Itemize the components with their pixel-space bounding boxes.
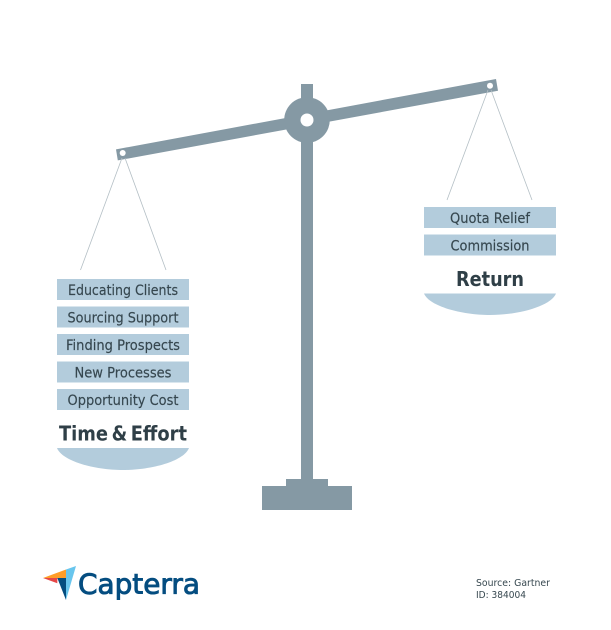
right pan: return: [424, 207, 556, 315]
source note: Source: Gartner: [476, 578, 551, 589]
left pan strings: [80, 158, 166, 270]
row: Sourcing Support: [57, 306, 189, 328]
wordmark: Capterra: [78, 568, 200, 600]
row: New Processes: New Processes: [74, 366, 172, 382]
right pan bowl: [424, 294, 556, 315]
left pan bowl: [57, 448, 189, 470]
scale stand and beam: [116, 79, 498, 510]
row: Educating Clients: [57, 279, 189, 300]
icon: Capterra arrow: [43, 566, 76, 600]
row: Sourcing Support: Sourcing Support: [68, 310, 179, 326]
row: Commission: Commission: [450, 238, 530, 254]
row: Opportunity Cost: Opportunity Cost: [68, 393, 179, 409]
row: New Processes: [57, 362, 189, 382]
source note: ID: 384004: [476, 590, 526, 601]
heading: Return: Return: [456, 267, 524, 291]
row: Finding Prospects: Finding Prospects: [66, 338, 180, 354]
row: Opportunity Cost: [57, 389, 189, 410]
right pan strings: [447, 90, 532, 200]
row: Educating Clients: Educating Clients: [68, 283, 178, 299]
heading: Time & Effort: Time & Effort: [59, 422, 187, 446]
left pan: time and effort: [57, 279, 189, 470]
row: Quota Relief: Quota Relief: [450, 211, 531, 227]
Capterra logo: [43, 566, 200, 600]
source note: [476, 578, 551, 601]
